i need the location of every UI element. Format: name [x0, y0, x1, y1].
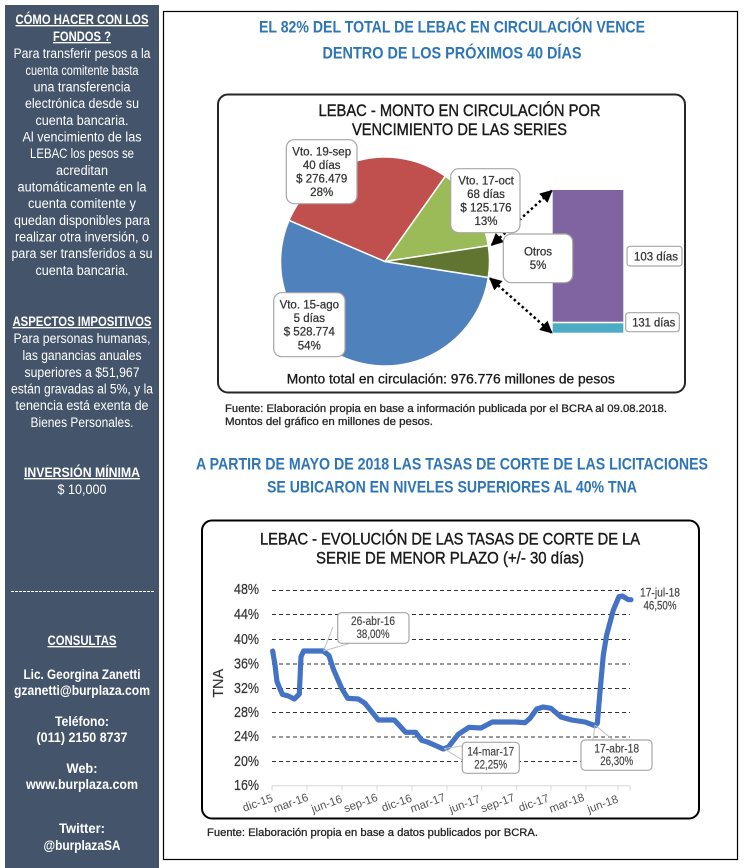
y axis labels: 24%: [234, 729, 259, 745]
line series: tasa de corte: [273, 596, 631, 749]
text block: transferencias: electrónica desde su: [25, 96, 139, 111]
label: 17-jul-18: 17-jul-18: [640, 588, 680, 600]
text block: contacto: Teléfono:: [55, 714, 109, 729]
chart title: LEBAC - EVOLUCIÓN DE LAS TASAS DE CORTE DE LA: [260, 529, 640, 548]
heading: vencimientos: EL 82% DEL TOTAL DE LEBAC EN CIRCULACIÓN VENCE: [259, 18, 645, 36]
chart title: SERIE DE MENOR PLAZO (+/- 30 días): [316, 549, 584, 567]
heading: como hacer con los fondos: FONDOS ?: [53, 29, 111, 44]
y axis labels: 40%: [234, 632, 259, 648]
y axis labels: [234, 582, 259, 794]
x axis labels: dic-17: [517, 793, 551, 815]
y axis labels: 44%: [234, 607, 259, 623]
text block: contacto: gzanetti@burplaza.com: [14, 683, 150, 698]
text block: contacto: @burplazaSA: [44, 838, 121, 853]
callout: otros: 5%: [530, 260, 546, 272]
chart title: LEBAC - MONTO EN CIRCULACIÓN POR: [318, 101, 601, 120]
text block: transferencias: una transferencia: [34, 80, 131, 94]
source note: pie chart: Fuente: Elaboración propia en base a información publicada por el BCRA al 09.08.2018.: [225, 403, 667, 415]
y axis labels: 48%: [234, 582, 259, 598]
panel: line chart card: [202, 520, 699, 818]
callout: 26-abr-16: 26-abr-16: [351, 616, 395, 628]
text block: aspectos impositivos: tenencia está exenta de: [16, 398, 148, 413]
callout: 14-mar-17: [444, 742, 519, 773]
x axis labels: dic-16: [380, 793, 414, 815]
callout: vto 17-oct: Vto. 17-oct: [458, 176, 515, 188]
text block: transferencias: acreditan: [56, 163, 108, 178]
callout: otros: Otros: [524, 247, 552, 259]
callout: vto 17-oct: [451, 169, 520, 233]
callout: 17-abr-18: [581, 725, 652, 770]
x axis labels: jun-17: [447, 794, 482, 816]
x axis labels: mar-17: [409, 792, 447, 816]
heading: como hacer con los fondos: [16, 12, 148, 44]
text block: transferencias: cuenta comitente basta: [26, 63, 139, 78]
text block: aspectos impositivos: superiores a $51,967: [24, 365, 140, 380]
callout: vto 15-ago: [274, 293, 345, 357]
text block: transferencias: cuenta comitente y: [28, 196, 136, 211]
callout: vto 17-oct: $ 125.176: [460, 202, 512, 214]
callout: 103 dias: [627, 246, 682, 266]
heading: tasas de corte: [196, 456, 708, 496]
y axis labels: 16%: [234, 778, 259, 794]
callout: vto 15-ago: Vto. 15-ago: [280, 300, 339, 312]
text block: transferencias: LEBAC los pesos se: [30, 146, 134, 161]
heading: inversion minima: INVERSIÓN MÍNIMA: [24, 465, 140, 480]
panel: sidebar: [5, 5, 159, 868]
callout: 131 dias: [626, 313, 679, 332]
callout: vto 17-oct: 13%: [474, 216, 498, 228]
label: 17-jul-18: [640, 588, 680, 613]
heading: aspectos impositivos: ASPECTOS IMPOSITIVOS: [12, 314, 152, 329]
x axis labels: jun-16: [309, 794, 344, 816]
y axis labels: 28%: [234, 705, 259, 721]
text block: transferencias: cuenta bancaria.: [36, 113, 128, 128]
callout: vto 15-ago: 54%: [298, 340, 321, 352]
heading: vencimientos: DENTRO DE LOS PRÓXIMOS 40 DÍAS: [322, 44, 582, 62]
x axis labels: [241, 792, 620, 816]
x axis labels: sep-17: [479, 792, 517, 815]
callout: 131 dias: 131 días: [632, 318, 675, 330]
text block: contacto: Lic. Georgina Zanetti: [24, 667, 140, 682]
text block: contacto: (011) 2150 8737: [36, 730, 128, 745]
callout: vto 19-sep: Vto. 19-sep: [292, 146, 351, 158]
callout: vto 17-oct: 68 días: [467, 189, 505, 201]
callout: vto 15-ago: $ 528.774: [284, 326, 335, 338]
x axis labels: jun-18: [585, 794, 620, 816]
chart title: [318, 101, 601, 139]
source note: line chart: Fuente: Elaboración propia en base a datos publicados por BCRA.: [207, 827, 538, 839]
callout: 17-abr-18: 26,30%: [600, 756, 633, 768]
chart title: VENCIMIENTO DE LAS SERIES: [352, 121, 567, 139]
text block: transferencias: realizar otra inversión, o: [15, 230, 149, 244]
text block: aspectos impositivos: [11, 331, 153, 430]
callout: 14-mar-17: 22,25%: [474, 760, 507, 772]
panel: main frame: [164, 12, 738, 860]
text block: contacto: Twitter:: [59, 821, 105, 836]
callout: vto 19-sep: [286, 140, 357, 204]
text block: contacto: www.burplaza.com: [25, 777, 138, 792]
text block: transferencias: para ser transferidos a su: [12, 246, 152, 261]
heading: tasas de corte: SE UBICARON EN NIVELES SUPERIORES AL 40% TNA: [267, 478, 637, 496]
panel: pie chart card: [218, 94, 685, 392]
callout: 26-abr-16: [324, 613, 409, 651]
text block: transferencias: Al vencimiento de las: [22, 130, 142, 144]
x axis labels: dic-15: [241, 793, 275, 815]
source note: pie chart: [225, 403, 667, 428]
text block: aspectos impositivos: las ganancias anuales: [22, 348, 142, 363]
text block: aspectos impositivos: están gravadas al 5%, y la: [11, 382, 153, 396]
callout: 17-abr-18: 17-abr-18: [594, 743, 639, 755]
callout: vto 19-sep: 40 días: [303, 160, 341, 172]
callout: vto 15-ago: 5 días: [294, 313, 325, 325]
text block: aspectos impositivos: Bienes Personales.: [30, 415, 134, 430]
callout: vto 19-sep: 28%: [310, 187, 333, 199]
text block: transferencias: quedan disponibles para: [14, 213, 150, 228]
y axis labels: 36%: [234, 656, 259, 672]
source note: pie chart: Montos del gráfico en millones de pesos.: [225, 416, 433, 428]
stacked bar: otros: [553, 190, 623, 333]
text block: contacto: [14, 667, 150, 853]
chart title: [260, 529, 640, 567]
y axis labels: 32%: [234, 681, 259, 697]
heading: consultas: CONSULTAS: [48, 633, 116, 648]
arrow: upper connector: [492, 191, 552, 245]
callout: otros: [503, 234, 573, 283]
text block: aspectos impositivos: Para personas humanas,: [14, 331, 150, 346]
y axis title: TNA: [211, 668, 227, 698]
x axis labels: mar-16: [272, 792, 310, 816]
callout: 14-mar-17: 14-mar-17: [467, 747, 514, 759]
callout: vto 19-sep: $ 276.479: [296, 174, 347, 186]
chart footer: monto total: Monto total en circulación: 976.776 millones de pesos: [287, 372, 615, 386]
x axis labels: mar-18: [548, 792, 586, 816]
heading: como hacer con los fondos: CÓMO HACER CON LOS: [16, 12, 148, 27]
heading: vencimientos: [259, 18, 645, 62]
text block: monto minimo: $ 10,000: [58, 482, 106, 497]
text block: transferencias: Para transferir pesos a la: [14, 46, 151, 61]
text block: transferencias: [12, 46, 152, 278]
x axis labels: sep-16: [342, 792, 380, 815]
arrow: lower connector: [490, 278, 552, 333]
y axis labels: 20%: [234, 754, 259, 770]
pie chart: [281, 157, 490, 366]
callout: 103 dias: 103 días: [634, 252, 678, 264]
text block: contacto: Web:: [66, 761, 98, 776]
callout: 26-abr-16: 38,00%: [356, 629, 390, 641]
text block: transferencias: cuenta bancaria.: [36, 263, 128, 278]
label: 17-jul-18: 46,50%: [644, 601, 676, 613]
text block: transferencias: automáticamente en la: [18, 180, 147, 194]
